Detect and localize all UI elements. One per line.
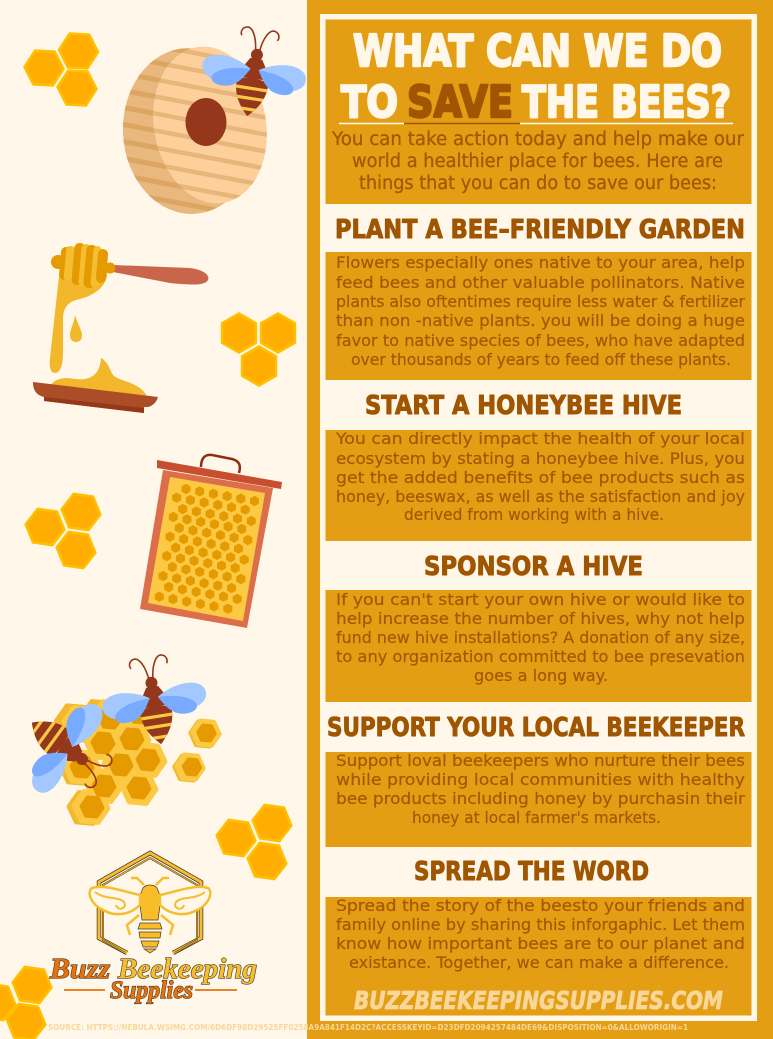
panel: spread the word: Spread the story of the beesto your friends and: [336, 896, 745, 915]
source line: SOURCE: HTTPS://NEBULA.WSIMG.COM/6D6DF98D29525FF0258A9A841F14D2C?ACCESSKEYID=D23DFD2094257484DE69&DISPOSITION=0&ALLOWORIGIN=1: [48, 1023, 688, 1032]
panel: plant a garden: than non -native plants. you will be doing a huge: [336, 311, 745, 330]
panel: sponsor a hive: If you can't start your own hive or would like to: [336, 590, 745, 609]
icon: honeycomb right of dipper: [214, 309, 303, 390]
intro text: [331, 129, 744, 194]
panel: sponsor a hive: to any organization committed to bee presevation: [336, 647, 745, 666]
panel: plant a garden: Flowers especially ones native to your area, help: [336, 253, 745, 272]
panel: spread the word: know how important bees are to our planet and: [336, 934, 745, 953]
icon: honeycomb bottom left: [0, 966, 54, 1039]
panel: right orange column: [307, 0, 773, 1039]
logo wordmark Buzz: Buzz: [49, 953, 111, 985]
icon: bee on hive: [196, 21, 313, 124]
panel: spread the word: existance. Together, we can make a difference.: [349, 953, 729, 972]
panel: spread the word: [326, 896, 752, 1016]
panel: start a hive: honey, beeswax, as well as the satisfaction and joy: [336, 487, 745, 506]
panel: header block: [326, 20, 752, 204]
panel: support beekeeper: [326, 751, 752, 847]
logo wordmark Supplies: Supplies: [110, 977, 193, 1004]
panel: spread the word: family online by sharing this inforgaphic. Let them: [336, 915, 745, 934]
icon: bee lower on cluster: [1, 680, 134, 817]
panel: support beekeeper: while providing local communities with healthy: [336, 770, 745, 789]
icon: plate with honey: [33, 358, 158, 413]
icon: bee upper on cluster: [96, 649, 213, 752]
panel: sponsor a hive: [326, 590, 752, 702]
panel: plant a garden: favor to native species of bees, who have adapted: [336, 331, 745, 350]
icon: honeycomb lower right: [214, 804, 294, 880]
panel: sponsor a hive: goes a long way.: [474, 666, 608, 685]
panel: plant a garden: over thousands of years to feed off these plants.: [351, 350, 731, 369]
icon: honeycomb cluster: [55, 697, 221, 824]
panel: sponsor a hive: fund new hive installations? A donation of any size,: [336, 628, 745, 647]
panel: plant a garden: [326, 252, 752, 380]
heading: start a hive: START A HONEYBEE HIVE: [365, 391, 682, 421]
panel: start a hive: You can directly impact the health of your local: [335, 429, 745, 448]
heading: sponsor a hive: SPONSOR A HIVE: [424, 552, 643, 582]
logo bee: [90, 878, 210, 953]
intro text: You can take action today and help make our: [331, 129, 744, 150]
intro text: world a healthier place for bees. Here are: [352, 151, 723, 172]
panel: support beekeeper: honey at local farmer's markets.: [412, 808, 661, 827]
title line 2: [339, 77, 733, 128]
intro text: things that you can do to save our bees:: [359, 173, 717, 194]
panel: start a hive: get the added benefits of bee products such as: [336, 468, 745, 487]
title line 2: TO: [341, 77, 398, 128]
panel: plant a garden: plants also oftentimes require less water & fertilizer: [336, 292, 745, 311]
icon: honeycomb top left: [24, 33, 99, 106]
icon: honeycomb mid left: [23, 493, 103, 569]
title line 2: SAVE: [407, 77, 513, 128]
panel: sponsor a hive: help increase the number of hives, why not help: [336, 609, 745, 628]
heading: spread the word: SPREAD THE WORD: [414, 857, 649, 887]
logo hexagon outline: [99, 853, 201, 953]
panel: start a hive: [326, 429, 752, 541]
logo: Buzz Beekeeping Supplies: [49, 853, 257, 1004]
panel: inner cream frame: [320, 14, 757, 1021]
panel: plant a garden: feed bees and other valuable pollinators. Native: [336, 273, 745, 292]
icon: honey dipper with dripping honey: [50, 243, 208, 373]
icon: round wooden hive: [122, 46, 267, 214]
icon: hive frame: [140, 455, 282, 628]
panel: support beekeeper: bee products including honey by purchasin their: [336, 789, 745, 808]
logo wordmark Beekeeping: Beekeeping: [117, 953, 257, 985]
panel: start a hive: derived from working with a hive.: [404, 505, 664, 524]
panel: support beekeeper: Support loval beekeepers who nurture their bees: [336, 751, 745, 770]
panel: start a hive: ecosystem by stating a honeybee hive. Plus, you: [336, 449, 745, 468]
